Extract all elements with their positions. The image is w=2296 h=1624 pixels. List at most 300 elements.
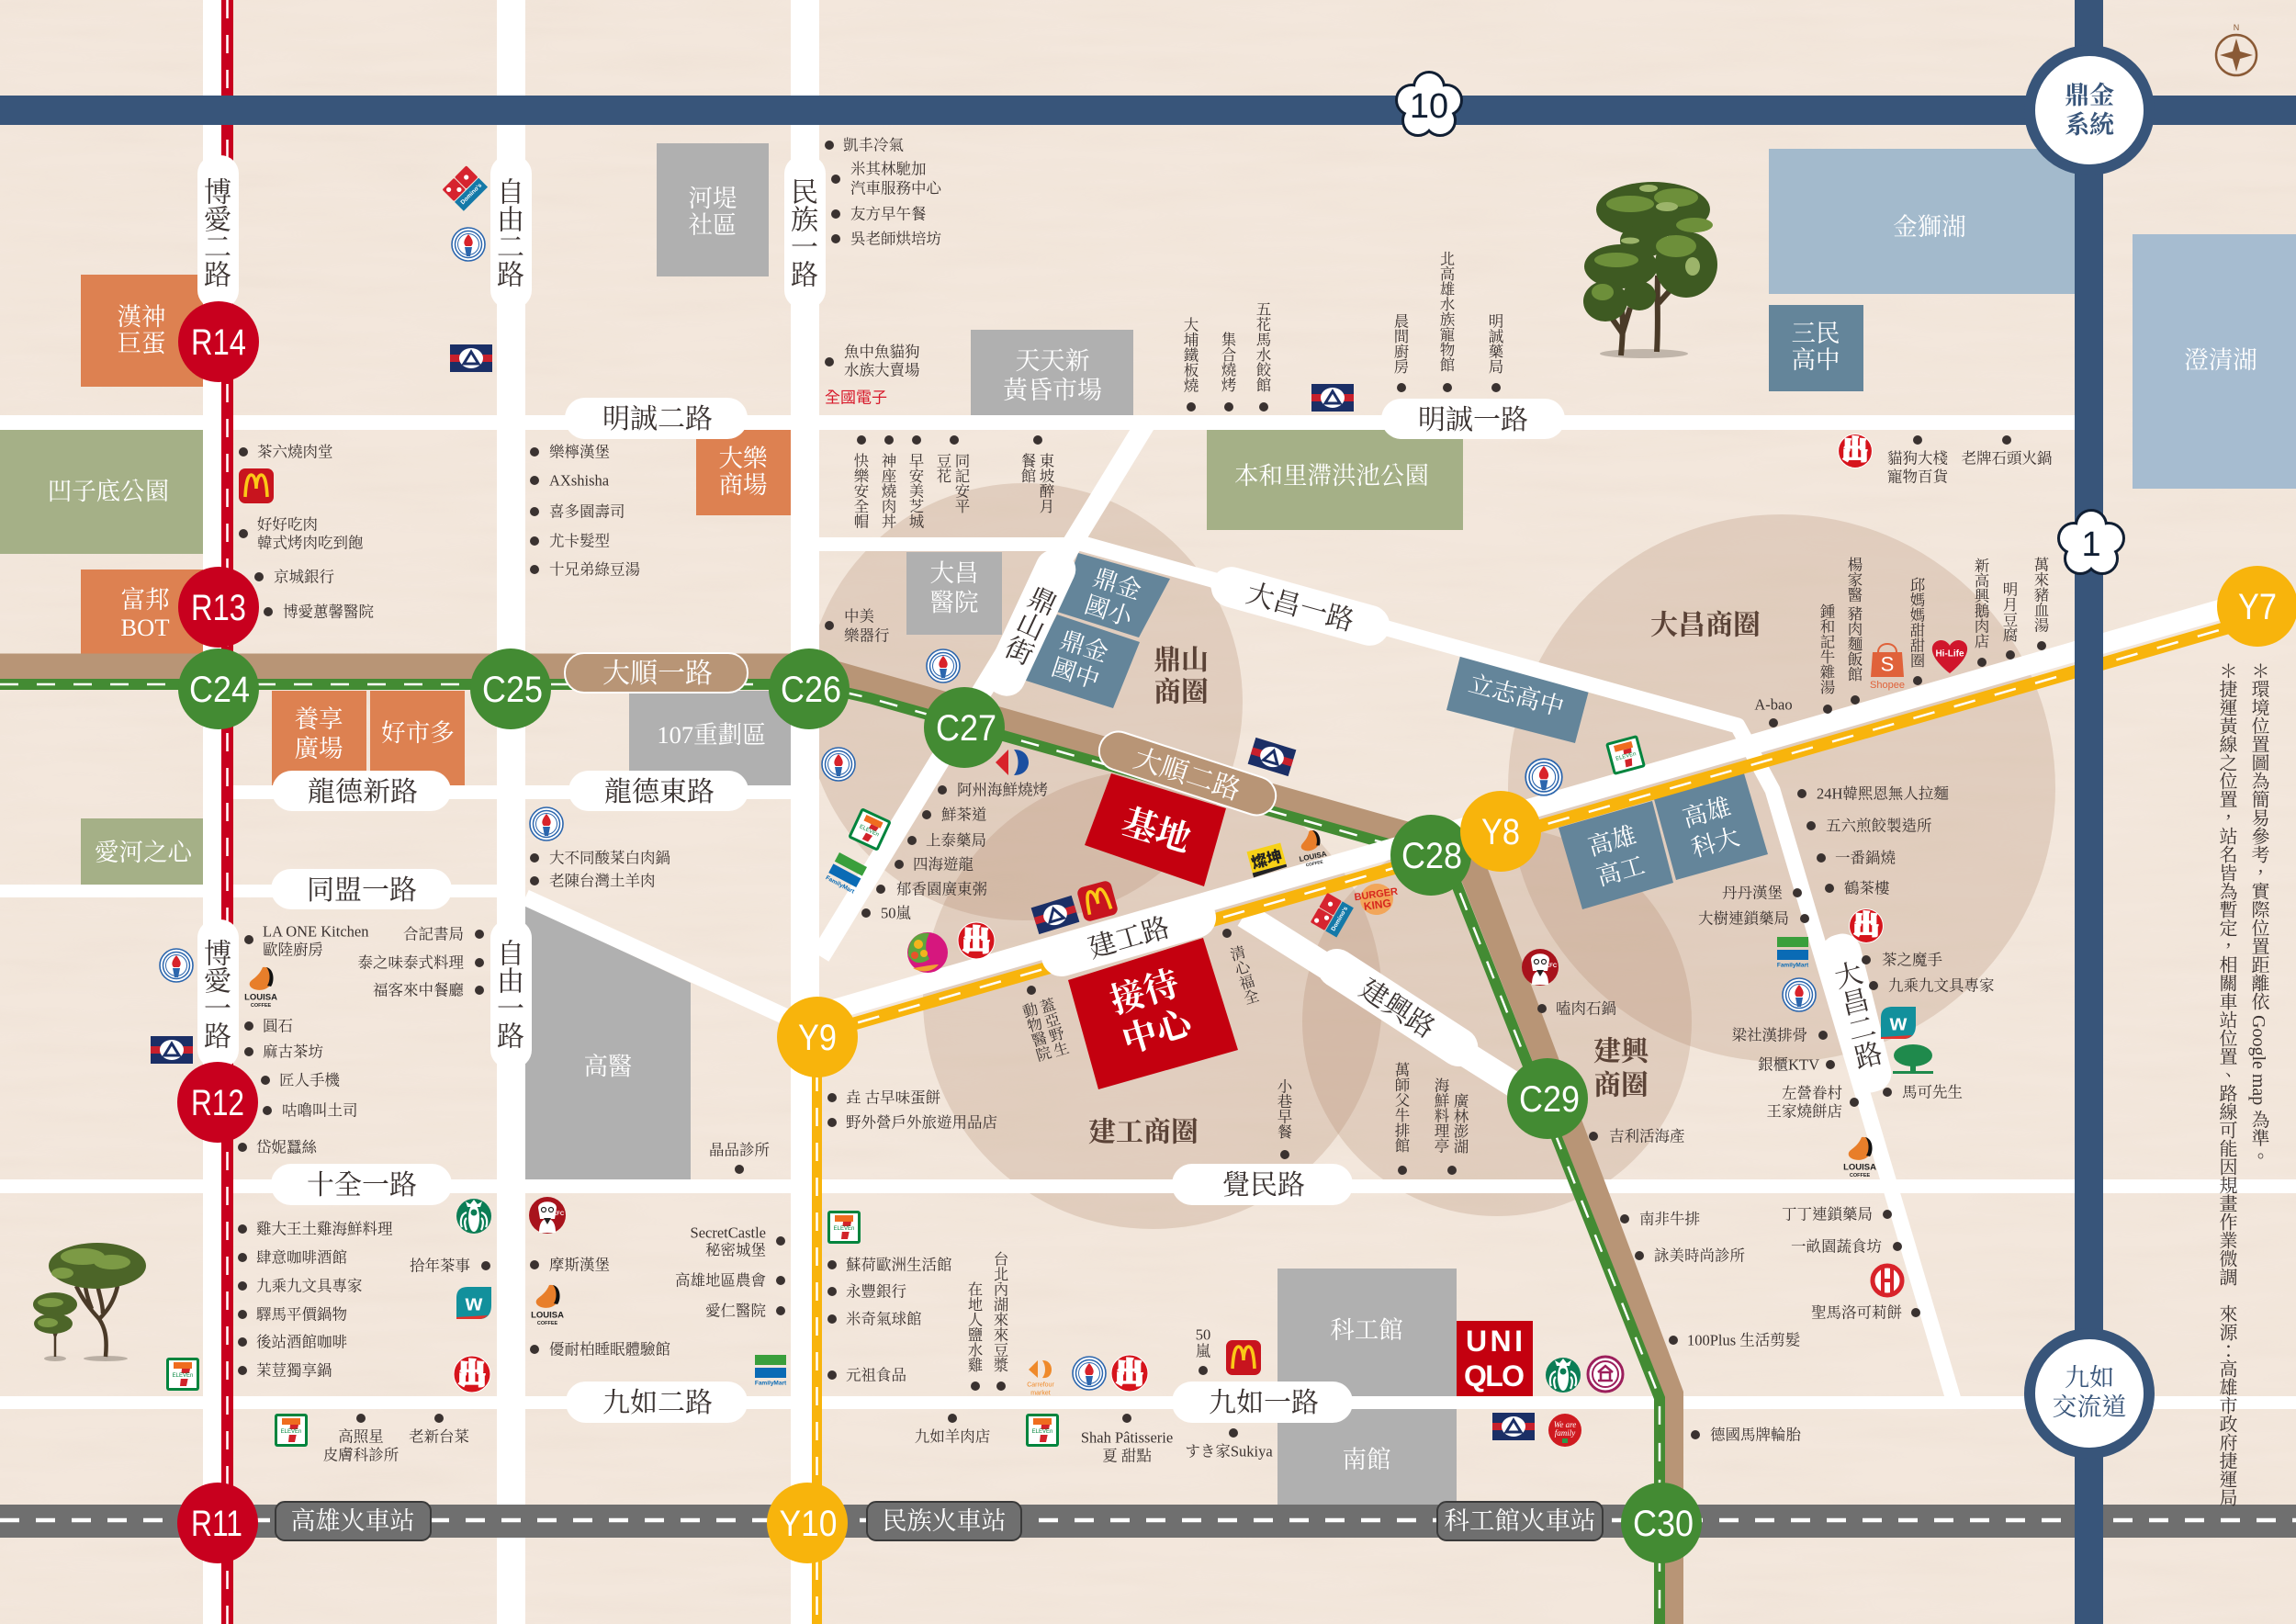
icon: torch: [452, 228, 485, 261]
block: 澄清湖: [2133, 234, 2296, 489]
pill: 建工路: [1037, 893, 1221, 981]
poi: 50嵐: [861, 904, 911, 922]
poi: 老陳台灣土羊肉: 老陳台灣土羊肉: [549, 873, 656, 889]
icon: Watsons: [1881, 1007, 1916, 1039]
pill: 同盟一路: [271, 869, 452, 909]
logo: UNIQLO: UNI: [1466, 1325, 1523, 1358]
station C30: [1621, 1483, 1702, 1563]
poi: 匠人手機: 匠人手機: [279, 1071, 340, 1089]
points of interest: south center: [827, 1211, 1623, 1464]
badge: freeway 10: [1398, 73, 1460, 134]
poi: 泰之味泰式料理: 泰之味泰式料理: [358, 953, 465, 972]
poi: 鍾和記牛雜湯: 鍾和記牛雜湯: [1818, 603, 1835, 694]
poi: 晶品診所: 晶品診所: [709, 1141, 770, 1159]
icon: 出: [1850, 909, 1883, 942]
circle: 建興商圈: [1302, 827, 1692, 1216]
poi: 上泰藥局: 上泰藥局: [926, 832, 986, 849]
block: 愛河之心: 愛河之心: [95, 839, 193, 866]
block: 高雄高工: [1559, 801, 1673, 909]
trees: [33, 182, 1717, 1361]
station C30: C30: [1633, 1504, 1694, 1544]
pill: 九如一路: [1172, 1382, 1353, 1423]
station C24: [178, 648, 259, 729]
icon: H logo: [1873, 1266, 1902, 1295]
pill: 九如二路: [566, 1382, 748, 1423]
icon: Hi-Life: Hi-Life: [1935, 648, 1964, 660]
pill: 大順一路: 大順一路: [602, 659, 713, 689]
station Y8: [1460, 791, 1541, 872]
area name: 鼎山商圈: 商圈: [1154, 678, 1209, 707]
poi: SecretCastle: 秘密城堡: [705, 1242, 766, 1258]
poi: 東坡醉月餐館: 餐館: [1019, 453, 1036, 483]
pill: 大昌一路: 大昌一路: [1243, 579, 1357, 637]
poi: LA ONE Kitchen: 歐陸廚房: [263, 941, 323, 959]
icon: 7-Eleven: [275, 1414, 308, 1447]
poi: 神座燒肉丼: 神座燒肉丼: [879, 453, 896, 529]
station R11: [177, 1483, 258, 1563]
circle: 鼎山商圈: [805, 483, 1243, 920]
points of interest: site surroundings: [825, 738, 1684, 1175]
poi: 大不同酸菜白肉鍋: 大不同酸菜白肉鍋: [549, 849, 670, 867]
pill: 覺民路: 覺民路: [1222, 1170, 1305, 1201]
poi: 米其林馳加: 汽車服務中心: [850, 180, 942, 197]
poi: 老牌石頭火鍋: 老牌石頭火鍋: [1962, 450, 2052, 467]
icon: torch: [927, 649, 960, 682]
compass: [2216, 23, 2257, 75]
block: 三民高中: 三民: [1791, 320, 1840, 347]
road: brown band C28 to C30: [1449, 850, 1683, 1624]
tag: 科工館火車站: [1437, 1502, 1603, 1540]
pill: 博愛二路: 博愛二路: [199, 177, 231, 288]
block: 鼎金國小: [1057, 553, 1170, 637]
poi: 丹丹漢堡: 丹丹漢堡: [1722, 884, 1783, 902]
badge: 九如交流道: 九如: [2065, 1364, 2114, 1392]
poi: A-bao: [1754, 696, 1793, 727]
icon: PX Mart: [1311, 384, 1354, 412]
pill: 博愛二路: [197, 155, 239, 309]
station C24: C24: [189, 670, 250, 710]
block: 107重劃區: [629, 691, 791, 785]
icon: 7-Eleven: [1026, 1414, 1059, 1447]
icon: torch: [822, 748, 855, 781]
icon: 出: [1839, 434, 1872, 468]
area name: 建興商圈: [1593, 1036, 1652, 1100]
icon: KFC: [529, 1197, 566, 1234]
poi: 聖馬洛可莉餅: 聖馬洛可莉餅: [1811, 1304, 1903, 1321]
poi: 晨間廚房: 晨間廚房: [1391, 313, 1409, 374]
area name: 建興商圈: 商圈: [1593, 1071, 1649, 1100]
pill: 博愛一路: [197, 919, 239, 1068]
reception block: 接待中心: 接待: [1106, 964, 1184, 1021]
icon: Carrefour market: market: [1030, 1391, 1051, 1396]
poi: 魚中魚貓狗: [825, 344, 920, 378]
poi: Shah Pâtisserie: 夏 甜點: [1102, 1448, 1152, 1464]
poi: SecretCastle: [691, 1224, 785, 1258]
icon: Carrefour: [996, 750, 1029, 775]
block: 高雄科大: [1654, 773, 1768, 880]
block: 富邦BOT: BOT: [121, 614, 169, 641]
icon: Shopee: [1870, 644, 1905, 691]
badge: 九如交流道: [2030, 1334, 2149, 1453]
tree: north pair: [1583, 182, 1717, 358]
poi: 南非牛排: 南非牛排: [1639, 1211, 1701, 1227]
poi: 麻古茶坊: 麻古茶坊: [263, 1043, 323, 1060]
station R14: [178, 301, 259, 382]
station C26: [769, 648, 850, 729]
block: 富邦BOT: 富邦: [121, 586, 169, 614]
pill: 自由二路: 自由二路: [492, 177, 524, 288]
white road along yellow line: [808, 599, 2257, 1017]
poi: 中美樂器行: [825, 608, 889, 645]
poi: 鶴茶樓: 鶴茶樓: [1844, 880, 1890, 897]
poi: 嗑肉石鍋: 嗑肉石鍋: [1556, 999, 1616, 1018]
icon: Burger King: [1353, 881, 1401, 918]
icon: 馬可先生 tree: [1893, 1044, 1933, 1074]
badge: freeway 1: [2060, 512, 2122, 572]
block: 南館: 南館: [1343, 1446, 1390, 1473]
note: 捷運黃線: ＊捷運黃線之位置，站名皆為暫定，相關車站位置、路線可能因規畫作業微調 來源：高雄市政府捷運局: [2216, 661, 2237, 1506]
area name: 鼎山商圈: 鼎山: [1154, 645, 1209, 676]
block: 立志高中: [1446, 656, 1589, 743]
icon: 7-Eleven: [848, 807, 892, 851]
poi: 左營眷村王家燒餅店: [1767, 1084, 1859, 1121]
block: 鼎金國中: 國中: [1048, 653, 1103, 694]
poi: 同記安平豆花: 同記安平: [952, 453, 970, 513]
pill: 自由二路: [490, 155, 532, 309]
poi: 早安美芝城: 早安美芝城: [906, 453, 924, 530]
block: 科工館: 科工館: [1330, 1316, 1403, 1344]
icon: Louisa: [1843, 1137, 1876, 1179]
poi: 明月豆腐: 明月豆腐: [2000, 581, 2018, 642]
poi: 北高雄水族寵物館: 北高雄水族寵物館: [1437, 251, 1455, 372]
pill: 十全一路: [271, 1164, 452, 1205]
poi: 優耐柏睡眠體驗館: 優耐柏睡眠體驗館: [549, 1341, 670, 1358]
site block: 基地: 基地: [1118, 803, 1195, 860]
pill: 龍德新路: [272, 771, 451, 811]
icon: We are family: [1548, 1414, 1581, 1447]
poi: 在地人鹽水雞: 在地人鹽水雞: [965, 1281, 983, 1373]
station C28: C28: [1401, 836, 1462, 876]
poi: 高照星皮膚科診所: 高照星: [338, 1427, 384, 1446]
poi: 京城銀行: 京城銀行: [274, 568, 334, 586]
poi: 野外營戶外旅遊用品店: 野外營戶外旅遊用品店: [846, 1113, 997, 1132]
roads: horizontal white: [0, 415, 2296, 1409]
points of interest: northwest: [239, 136, 942, 621]
points of interest: east: [1525, 434, 2052, 1444]
station R12: R12: [191, 1083, 244, 1123]
station R13: [178, 567, 259, 648]
pill: 大順一路: [565, 653, 748, 693]
icon: Carrefour market: Carrefour: [1027, 1382, 1054, 1389]
pill: 大昌二路: [1817, 930, 1896, 1097]
poi: 圓石: 圓石: [263, 1018, 293, 1034]
pill: 博愛一路: 博愛一路: [199, 939, 231, 1049]
station Y10: [767, 1483, 848, 1563]
poi: 蘇荷歐洲生活館: 蘇荷歐洲生活館: [846, 1257, 952, 1273]
poi: 鮮茶道: 鮮茶道: [941, 806, 986, 823]
icon: floral shop: [907, 932, 948, 973]
poi: 廣林澎湖海鮮料理亭: 海鮮料理亭: [1432, 1077, 1449, 1154]
icon: 出: [958, 922, 995, 959]
icon: torch: [530, 807, 563, 840]
poi: 愛仁醫院: 愛仁醫院: [705, 1303, 766, 1319]
block: 鼎金國中: [1023, 615, 1140, 708]
badge: freeway 1: 1: [2081, 525, 2101, 564]
poi: 圓石: [244, 1018, 293, 1034]
poi: 貓狗大棧: [1887, 435, 1949, 485]
poi: 米其林馳加: 米其林馳加: [850, 160, 926, 178]
block: 大樂商場: [696, 430, 791, 515]
pill: 龍德新路: 龍德新路: [308, 777, 418, 807]
poi: 小巷早餐: 小巷早餐: [1275, 1078, 1292, 1140]
station R13: R13: [191, 588, 246, 628]
poi: 雞大王土雞海鮮料理: 雞大王土雞海鮮料理: [256, 1220, 393, 1238]
tag: 高雄火車站: [276, 1502, 431, 1540]
poi: 吉利活海產: 吉利活海產: [1609, 1128, 1684, 1145]
railway station tags: [276, 1502, 1603, 1540]
icon: Hi-Life: [1932, 640, 1967, 673]
block: 河堤社區: 社區: [689, 211, 737, 239]
tag: 高雄火車站: 高雄火車站: [290, 1507, 415, 1535]
icon: torch: [1073, 1357, 1106, 1390]
pill: 十全一路: 十全一路: [307, 1170, 417, 1201]
station C26: C26: [781, 670, 841, 710]
poi: 米奇氣球館: 米奇氣球館: [846, 1310, 922, 1328]
poi: 茶之魔手: 茶之魔手: [1882, 952, 1942, 968]
poi: 楊家醫 豬肉麵飯館: 楊家醫 豬肉麵飯館: [1845, 556, 1863, 682]
poi: 中美樂器行: 樂器行: [844, 626, 889, 645]
area name: 鼎山商圈: [1154, 645, 1209, 707]
icon: PX Mart: [1492, 1413, 1535, 1440]
icon: McDonald's: [1076, 880, 1119, 922]
pill: 明誠二路: 明誠二路: [602, 404, 713, 434]
poi: 郁香園廣東粥: 郁香園廣東粥: [896, 880, 987, 898]
poi: 好好吃肉: [239, 516, 364, 551]
poi: 廣林澎湖海鮮料理亭: 廣林澎湖: [1451, 1093, 1469, 1154]
icon: We are family: family: [1555, 1428, 1575, 1438]
poi: 蓋亞野生動物醫院: [1019, 986, 1071, 1064]
freeway interchange badges: [1398, 51, 2149, 1453]
station Y9: Y9: [798, 1018, 837, 1058]
block: 天天新黃昏市場: [971, 330, 1133, 416]
icon: Burger King: BURGER: [1354, 886, 1399, 903]
area name: 大昌商圈: 大昌商圈: [1650, 610, 1761, 641]
logo: 全國電子: 全國電子: [825, 389, 887, 406]
road name pills: [197, 155, 1896, 1423]
block: 養享廣場: 廣場: [294, 735, 343, 762]
poi: 九如羊肉店: [915, 1414, 990, 1446]
roads: vertical white: [203, 0, 819, 1624]
station C28: [1390, 815, 1471, 896]
station Y9: [777, 997, 858, 1077]
poi: 博愛蕙馨醫院: 博愛蕙馨醫院: [283, 603, 375, 621]
trade area circles: [805, 483, 2055, 1229]
poi: Shah Pâtisserie: Shah Pâtisserie: [1081, 1429, 1173, 1446]
badge: freeway 10: 10: [1410, 87, 1448, 126]
poi: 合記書局: 合記書局: [403, 926, 464, 942]
roads: diagonal white: [525, 423, 1954, 1403]
pill: 明誠一路: [1381, 399, 1565, 439]
poi: 貓狗大棧: 寵物百貨: [1887, 468, 1949, 485]
badge: 鼎金系統: 系統: [2065, 111, 2116, 139]
station Y7: [2217, 566, 2296, 647]
poi: 廣林澎湖海鮮料理亭: [1432, 1077, 1469, 1175]
poi: 鶴茶樓: [1825, 880, 1890, 897]
pill: 明誠二路: [565, 398, 748, 439]
poi: 100Plus 生活剪髮: 100Plus 生活剪髮: [1687, 1332, 1800, 1348]
block: 南館: [1277, 1409, 1457, 1505]
poi: LA ONE Kitchen: LA ONE Kitchen: [263, 922, 368, 941]
icon: Louisa: [1294, 829, 1329, 869]
note: 環境位置: ＊環境位置圖為簡易參考，實際位置距離依 Google map 為準。: [2248, 661, 2269, 1165]
poi: 清心福全: 清心福全: [1226, 943, 1261, 1007]
block: 凹子底公園: 凹子底公園: [48, 478, 169, 505]
block: 三民高中: [1769, 305, 1863, 391]
block: 富邦BOT: [81, 570, 203, 654]
poi: 明誠藥局: 明誠藥局: [1486, 313, 1503, 374]
poi: 九如羊肉店: 九如羊肉店: [915, 1427, 990, 1446]
poi: 台北內湖來來豆漿: 台北內湖來來豆漿: [991, 1251, 1008, 1372]
logo: UNIQLO: [1457, 1321, 1533, 1396]
icon: PX Mart: [1031, 896, 1079, 934]
block: 河堤社區: 河堤: [689, 185, 737, 212]
icon: McDonald's: [1226, 1340, 1261, 1375]
badge: 鼎金系統: 鼎金: [2065, 82, 2114, 109]
block: 鼎金國中: 鼎金: [1057, 626, 1111, 667]
poi: 大樹連鎖藥局: 大樹連鎖藥局: [1698, 909, 1789, 928]
block: 河堤社區: [657, 143, 769, 276]
poi: 凱丰冷氣: 凱丰冷氣: [843, 136, 904, 154]
poi: 老牌石頭火鍋: [1962, 435, 2052, 467]
poi: 魚中魚貓狗: 魚中魚貓狗: [844, 344, 920, 360]
poi: SecretCastle: SecretCastle: [691, 1224, 766, 1242]
poi: 一畝園蔬食坊: 一畝園蔬食坊: [1791, 1238, 1882, 1255]
block: 科工館: [1277, 1269, 1457, 1396]
poi: 一番鍋燒: 一番鍋燒: [1835, 849, 1896, 867]
poi: AXshisha: AXshisha: [549, 472, 610, 489]
road: 大順路 brown band: [0, 667, 1431, 841]
pill: 大順二路: 大順二路: [1130, 743, 1244, 806]
poi: 新高興鵝肉店: 新高興鵝肉店: [1972, 558, 1989, 648]
poi: 集合燒烤: 集合燒烤: [1219, 332, 1236, 393]
icon: PX Mart: [450, 344, 492, 372]
circle: 大昌商圈: [1508, 514, 2055, 1062]
icon: FamilyMart: [825, 852, 868, 896]
poi: 快樂安全帽: 快樂安全帽: [851, 453, 869, 529]
poi: すき家Sukiya: すき家Sukiya: [1185, 1442, 1273, 1460]
icon: KFC: [1522, 949, 1559, 986]
poi: 垚 古早味蛋餅: 垚 古早味蛋餅: [846, 1089, 941, 1106]
poi: 驛馬平價鍋物: 驛馬平價鍋物: [255, 1306, 347, 1323]
poi: 左營眷村王家燒餅店: 王家燒餅店: [1767, 1102, 1842, 1121]
pill: 民族一路: 民族一路: [786, 177, 818, 288]
icon: 出: [1111, 1355, 1148, 1392]
poi: 十兄弟綠豆湯: 十兄弟綠豆湯: [549, 560, 640, 579]
poi: 24H韓熙恩無人拉麵: 24H韓熙恩無人拉麵: [1817, 784, 1949, 803]
block: 鼎金國小: 鼎金: [1090, 563, 1144, 604]
icon: FamilyMart: [755, 1355, 787, 1387]
poi: 萬師父牛排館: 萬師父牛排館: [1392, 1062, 1410, 1153]
block: 澄清湖: 澄清湖: [2184, 346, 2257, 374]
icon: We are family: We are: [1554, 1420, 1576, 1429]
MRT yellow line: [817, 619, 2257, 1034]
block: 高雄高工: 高工: [1593, 851, 1648, 891]
block: 大昌醫院: [906, 552, 1002, 635]
pill: 龍德東路: 龍德東路: [604, 777, 715, 807]
icon: 7-Eleven: [166, 1358, 199, 1391]
poi: 同記安平豆花: [934, 435, 970, 513]
poi: 拾年茶事: 拾年茶事: [410, 1257, 470, 1275]
points of interest: southwest: [151, 807, 787, 1464]
poi: 阿州海鮮燒烤: 阿州海鮮燒烤: [957, 781, 1048, 799]
pill: 九如二路: 九如二路: [602, 1388, 713, 1418]
block: 漢神巨蛋: [81, 275, 203, 387]
poi: Shah Pâtisserie: [1081, 1414, 1173, 1464]
poi: 老新台菜: 老新台菜: [409, 1427, 469, 1446]
site block: 基地: [1085, 773, 1226, 886]
poi: 梁社漢排骨: 梁社漢排骨: [1732, 1027, 1807, 1043]
icon: 燦坤: 燦坤: [1248, 843, 1285, 873]
poi: 喜多園壽司: 喜多園壽司: [549, 503, 625, 520]
block: 高雄科大: 高雄: [1680, 793, 1734, 832]
icon: McDonald's: [239, 468, 274, 503]
block: 凹子底公園: [0, 430, 203, 554]
poi: 高照星皮膚科診所: 皮膚科診所: [323, 1446, 399, 1464]
station R12: [177, 1062, 258, 1143]
poi: 摩斯漢堡: 摩斯漢堡: [549, 1257, 610, 1273]
poi: 岱妮蠶絲: 岱妮蠶絲: [256, 1139, 318, 1156]
points of interest: along 明誠路: [822, 251, 1503, 781]
poi: すき家Sukiya: [1185, 1428, 1273, 1460]
block: 金獅湖: 金獅湖: [1893, 213, 1966, 241]
poi: 大埔鐵板燒: 大埔鐵板燒: [1181, 317, 1199, 393]
badge: 九如交流道: 交流道: [2052, 1393, 2127, 1421]
poi: A-bao: A-bao: [1754, 696, 1793, 713]
poi: 福客來中餐廳: 福客來中餐廳: [373, 981, 465, 999]
poi: 東坡醉月餐館: 東坡醉月: [1037, 453, 1054, 513]
trade area names: [1088, 610, 1761, 1148]
reception block: 接待中心: 中心: [1118, 1002, 1200, 1061]
MRT green line: [0, 684, 1431, 856]
poi: 貓狗大棧: 貓狗大棧: [1887, 450, 1948, 467]
pill: 建興路: [1311, 942, 1485, 1074]
poi: 蓋亞野生動物醫院: 蓋亞野生: [1036, 996, 1071, 1059]
poi: 同記安平豆花: 豆花: [934, 453, 951, 483]
poi: 50嵐: 50嵐: [881, 904, 911, 922]
freeway 1: [2075, 0, 2103, 1624]
logo: UNIQLO: QLO: [1464, 1359, 1525, 1393]
icon: 7-Eleven: [827, 1211, 861, 1244]
poi: 五六煎餃製造所: 五六煎餃製造所: [1826, 816, 1932, 834]
block: 天天新黃昏市場: 天天新: [1016, 347, 1089, 375]
poi: LA ONE Kitchen: [244, 922, 368, 959]
station Y7: Y7: [2238, 587, 2277, 627]
pill: 自由一路: 自由一路: [492, 939, 524, 1049]
station R14: R14: [191, 322, 246, 363]
poi: 吳老師烘培坊: 吳老師烘培坊: [850, 230, 941, 248]
reception block: 接待中心: [1068, 938, 1238, 1089]
poi: 茉荳獨享鍋: 茉荳獨享鍋: [256, 1361, 332, 1380]
MRT yellow line south: [812, 1038, 822, 1624]
tree: southwest pair: [33, 1243, 146, 1361]
MRT green line south: [1446, 859, 1660, 1624]
poi: 九乘九文具專家: 九乘九文具專家: [1888, 977, 1995, 994]
poi: 高照星皮膚科診所: [323, 1414, 399, 1464]
icon: torch: [160, 949, 193, 982]
badge: 鼎金系統: [2030, 51, 2149, 170]
pill: 龍德東路: [568, 771, 748, 811]
compass: N: [2234, 23, 2239, 32]
